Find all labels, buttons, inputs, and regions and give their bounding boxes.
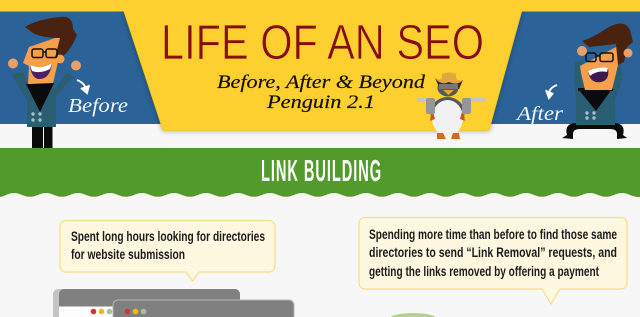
panel: after background [491,12,640,124]
panel: section banner: LINK BUILDING [261,153,382,188]
callout: after [359,218,627,304]
top yellow strip [0,0,640,12]
callout: before: for website submission [71,247,185,262]
subtitle [217,73,426,113]
browser window: back [53,289,240,317]
panel: title banner [123,9,522,130]
character: happy SEO before [8,17,81,148]
callout: before [60,220,275,281]
icon: green blob [389,313,437,317]
after label: After [515,103,563,125]
character: penguin [417,72,485,139]
subtitle: Before, After & Beyond [217,73,426,93]
callout: before: Spent long hours looking for directories [71,229,265,244]
subtitle: Penguin 2.1 [266,93,375,113]
before label: Before [68,95,128,117]
character: stressed SEO after [562,24,633,139]
arrow: before [77,80,89,93]
panel: before background [0,12,161,124]
browser window: front [113,300,294,317]
title: LIFE OF AN SEO [161,16,484,70]
panel: section banner [0,148,640,197]
arrow: after [546,85,557,98]
